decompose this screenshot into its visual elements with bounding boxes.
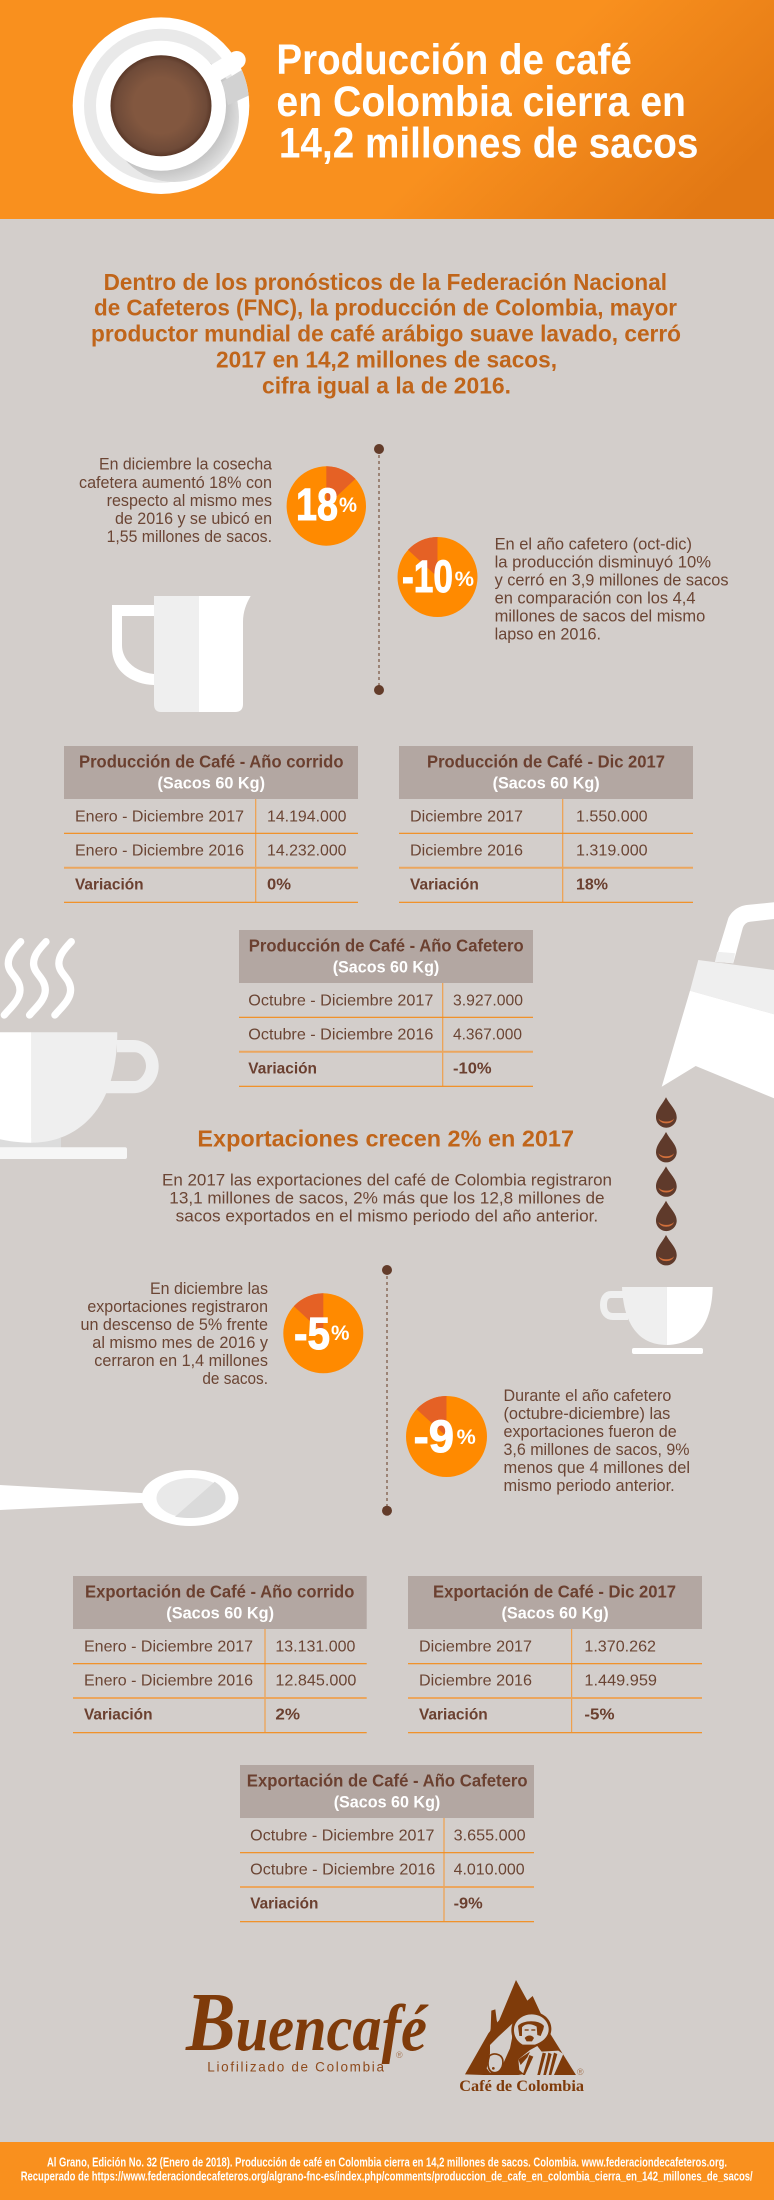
table: exports year to date: (Sacos 60 Kg) [166,1603,274,1622]
table: exports year to date: Enero - Diciembre 2017 [84,1639,253,1656]
pie: -10%: -10 [402,551,453,602]
intro text: cifra igual a la de 2016. [262,373,511,399]
intro text: 2017 en 14,2 millones de sacos, [216,347,557,373]
icon: spoon [0,1470,238,1526]
table: exports coffee year: Octubre - Diciembre 2016 [250,1862,435,1879]
divider: production timeline [374,444,384,695]
logo: Buencafé: Buencafé [185,1976,429,2069]
pie: -9%: % [457,1425,476,1449]
title: Producción de café [276,37,632,84]
logo: Café de Colombia: Café de Colombia [459,2078,584,2095]
table: production December 2017: 1.319.000 [576,843,648,860]
intro text: Dentro de los pronósticos de la Federación Nacional [104,269,667,295]
table: production coffee year: Producción de Café - Año Cafetero [249,936,524,956]
text: December exports: al mismo mes de 2016 y [92,1334,269,1352]
table: exports year to date: Enero - Diciembre 2016 [84,1673,253,1690]
text: coffee year production: en comparación con los 4,4 [495,590,696,608]
icon: falling coffee drops [656,1097,677,1265]
heading: exports: Exportaciones crecen 2% en 2017 [197,1126,574,1152]
pie: -5%: % [331,1321,350,1345]
text: coffee year production: lapso en 2016. [495,626,601,644]
pie: -10%: % [455,567,474,591]
text: coffee year exports: menos que 4 millones del [504,1459,690,1477]
title: 14,2 millones de sacos [279,120,698,167]
divider: exports timeline [382,1265,392,1516]
table: exports year to date: 2% [275,1707,300,1724]
header banner [0,0,774,219]
text: coffee year exports: Durante el año cafetero [504,1387,671,1405]
text: December exports: de sacos. [202,1370,268,1388]
table: exports December 2017: Exportación de Café - Dic 2017 [433,1582,676,1602]
table: production year to date: 14.194.000 [267,809,347,826]
table: production coffee year: (Sacos 60 Kg) [333,957,439,976]
table: exports year to date: Exportación de Café - Año corrido [85,1582,354,1602]
text: exports summary: sacos exportados en el mismo periodo del año anterior. [176,1208,598,1226]
table: exports year to date: Variación [84,1707,152,1724]
table: exports year to date: 12.845.000 [275,1673,357,1690]
logo: Buencafé: ® [396,2050,403,2060]
table: production coffee year: 4.367.000 [453,1027,522,1044]
table: production coffee year: 3.927.000 [453,993,523,1010]
table: production December 2017: Diciembre 2017 [410,809,523,826]
text: coffee year exports: exportaciones fueron de [504,1423,677,1441]
table: production December 2017: Diciembre 2016 [410,843,523,860]
text: coffee year exports [504,1387,690,1495]
icon: small cup [604,1287,713,1354]
table: exports coffee year: Variación [250,1896,318,1913]
icon: mountain, mule and coffee grower [465,1980,576,2075]
table: exports coffee year: 3.655.000 [454,1828,526,1845]
text: December harvest: respecto al mismo mes [107,492,272,510]
footer [0,2142,774,2200]
table: production coffee year: -10% [453,1061,492,1078]
table: production coffee year: Octubre - Diciembre 2017 [248,993,434,1010]
table: production December 2017: 18% [576,877,608,894]
pie: 18% [287,466,366,546]
pie: -9%: -9 [414,1411,454,1462]
table: exports year to date: 13.131.000 [275,1639,356,1656]
icon: milk pitcher [112,596,251,712]
table: exports coffee year: Octubre - Diciembre 2017 [250,1828,435,1845]
table: production year to date: 0% [267,877,291,894]
table: production year to date: Variación [75,877,144,894]
text: coffee year exports: mismo periodo anterior. [504,1477,675,1495]
table: exports coffee year [240,1765,534,1922]
table: exports December 2017: 1.449.959 [584,1673,657,1690]
table: exports coffee year: (Sacos 60 Kg) [334,1792,440,1811]
pie: 18%: 18 [296,479,338,530]
text: coffee year production: millones de sacos del mismo [495,608,705,626]
intro text: de Cafeteros (FNC), la producción de Colombia, mayor [94,295,677,321]
text: December harvest: En diciembre la cosecha [99,456,273,474]
table: production December 2017: 1.550.000 [576,809,648,826]
table: exports December 2017: -5% [584,1707,614,1724]
intro text: productor mundial de café arábigo suave lavado, cerró [91,321,681,347]
text: December exports: un descenso de 5% frente [80,1316,268,1334]
text: December exports: En diciembre las [150,1280,268,1298]
table: exports December 2017: Diciembre 2017 [419,1639,532,1656]
text: exports summary: En 2017 las exportaciones del café de Colombia registraron [162,1172,612,1190]
text: December harvest [79,456,273,546]
logo: Buencafé: Liofilizado de Colombia [207,2060,384,2075]
table: production coffee year: Variación [248,1061,317,1078]
icon: coffee cup from above [73,17,250,194]
table: exports coffee year: Exportación de Café - Año Cafetero [247,1771,528,1791]
table: exports coffee year: -9% [454,1896,483,1913]
table: production year to date [64,746,358,902]
pie: -5% [283,1293,363,1373]
logo: Café de Colombia: ® [577,2067,584,2077]
table: production December 2017: Producción de Café - Dic 2017 [427,752,665,772]
table: production coffee year [239,930,533,1086]
pie: -9% [406,1396,487,1477]
text: December exports [80,1280,269,1388]
intro text [91,269,681,399]
text: coffee year production: y cerró en 3,9 millones de sacos [495,572,728,590]
table: exports December 2017: Diciembre 2016 [419,1673,532,1690]
icon: steaming cup [0,942,159,1159]
table: production year to date: Enero - Diciembre 2017 [75,809,244,826]
text: December harvest: 1,55 millones de sacos. [107,528,272,546]
icon: pouring pitcher [662,902,774,1098]
text: coffee year production: En el año cafetero (oct-dic) [495,535,692,553]
text: December harvest: cafetera aumentó 18% con [79,474,272,492]
text: coffee year exports: 3,6 millones de sacos, 9% [504,1441,690,1459]
table: exports coffee year: 4.010.000 [454,1862,525,1879]
table: exports December 2017 [408,1576,702,1733]
text: coffee year exports: (octubre-diciembre) las [504,1405,670,1423]
table: exports December 2017: Variación [419,1707,488,1724]
title [276,37,698,167]
text: coffee year production: la producción disminuyó 10% [495,554,711,572]
table: production December 2017: (Sacos 60 Kg) [493,773,600,792]
pie: -10% [398,537,478,617]
text: exports summary: 13,1 millones de sacos, 2% más que los 12,8 millones de [169,1190,605,1208]
table: production year to date: 14.232.000 [267,843,347,860]
pie: 18%: % [339,493,357,517]
text: December harvest: de 2016 y se ubicó en [115,510,272,528]
table: production year to date: Enero - Diciembre 2016 [75,843,244,860]
table: exports December 2017: 1.370.262 [584,1639,656,1656]
table: production year to date: (Sacos 60 Kg) [158,773,265,792]
logo: Café de Colombia [459,1980,584,2095]
text: December exports: cerraron en 1,4 millones [94,1352,268,1370]
text: exports summary [162,1172,612,1226]
pie: -5%: -5 [294,1308,330,1359]
text: coffee year production [495,535,728,644]
table: production December 2017: Variación [410,877,479,894]
table: production coffee year: Octubre - Diciembre 2016 [248,1027,434,1044]
table: exports December 2017: (Sacos 60 Kg) [502,1603,609,1622]
table: production December 2017 [399,746,693,902]
table: production year to date: Producción de Café - Año corrido [79,752,344,772]
text: December exports: exportaciones registraron [87,1298,268,1316]
table: exports year to date [73,1576,367,1733]
title: en Colombia cierra en [276,79,686,126]
